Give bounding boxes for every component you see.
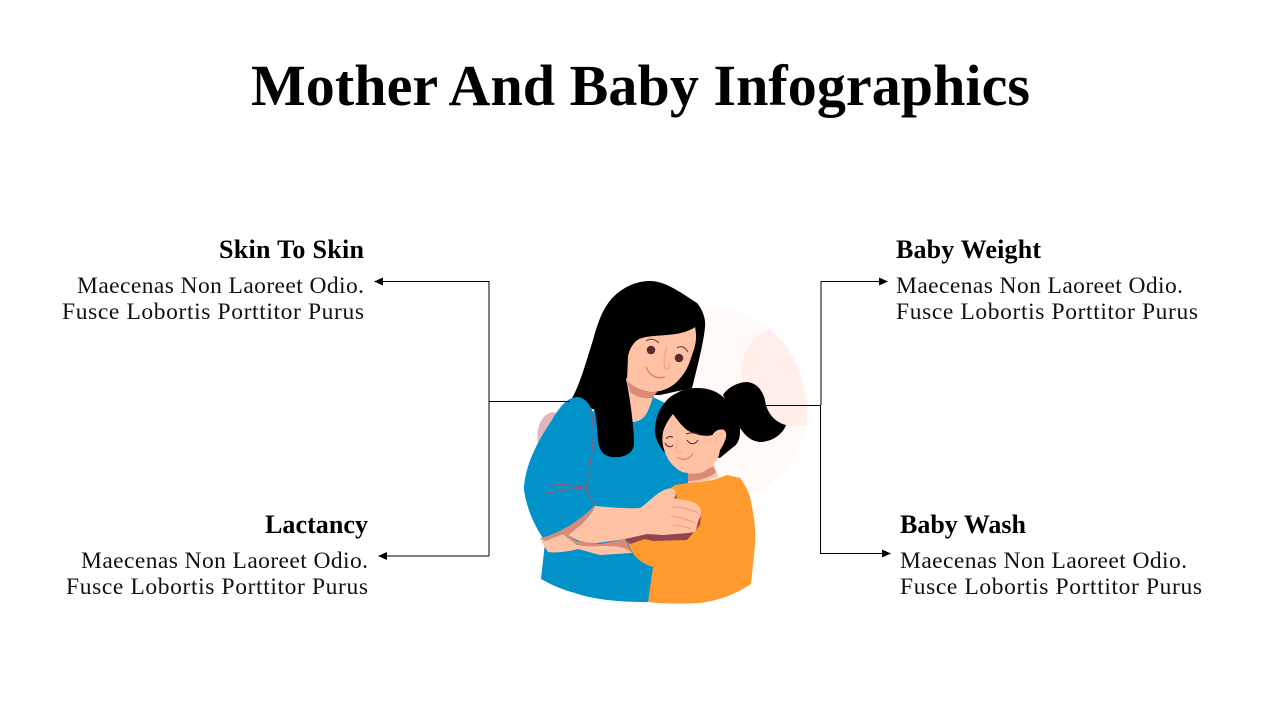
baby eyes and brows	[665, 433, 700, 447]
mother neck	[626, 378, 657, 422]
text block: lactancy: Fusce Lobortis Porttitor Purus	[66, 574, 368, 600]
baby hair	[655, 388, 740, 458]
blue shirt	[524, 385, 690, 602]
baby ear	[712, 429, 726, 452]
ponytail	[723, 382, 786, 442]
mother arm and hand	[568, 488, 701, 543]
mother eyes and brows	[647, 346, 655, 354]
text block: baby wash: Baby Wash	[900, 510, 1027, 539]
long hair strand	[591, 372, 634, 457]
mother lower hand	[540, 534, 632, 555]
baby face	[662, 414, 720, 474]
text block: lactancy	[66, 510, 368, 600]
text block: skin to skin: Fusce Lobortis Porttitor Purus	[62, 299, 364, 325]
text block: baby wash: Fusce Lobortis Porttitor Purus	[900, 574, 1202, 600]
text block: skin to skin: Skin To Skin	[219, 235, 365, 264]
connector: left arrows	[374, 278, 570, 560]
lower arm shadow	[540, 505, 632, 553]
background circle	[610, 308, 808, 506]
mother nose and smile	[664, 347, 669, 369]
baby nose and smile	[676, 439, 682, 453]
baby orange shirt	[627, 475, 755, 604]
mother hand shadow	[625, 512, 701, 544]
sleeve folds	[544, 409, 594, 505]
title: Mother And Baby Infographics	[251, 53, 1030, 118]
text block: skin to skin	[62, 235, 365, 325]
mother back arm	[538, 412, 565, 450]
illustration: mother and baby	[524, 281, 786, 604]
text block: lactancy: Maecenas Non Laoreet Odio.	[81, 548, 368, 574]
text block: baby wash	[900, 510, 1202, 600]
text block: baby weight: Baby Weight	[896, 235, 1041, 264]
mother face	[627, 327, 696, 392]
text block: baby wash: Maecenas Non Laoreet Odio.	[900, 548, 1187, 574]
connector: right arrows	[765, 278, 891, 558]
text block: skin to skin: Maecenas Non Laoreet Odio.	[77, 273, 364, 299]
baby neck	[688, 464, 718, 483]
text block: baby weight	[896, 235, 1198, 325]
hand finger lines	[671, 507, 698, 529]
text block: baby weight: Fusce Lobortis Porttitor Purus	[896, 299, 1198, 325]
mother hair back	[570, 281, 705, 410]
text block: lactancy: Lactancy	[265, 510, 368, 539]
text block: baby weight: Maecenas Non Laoreet Odio.	[896, 273, 1183, 299]
